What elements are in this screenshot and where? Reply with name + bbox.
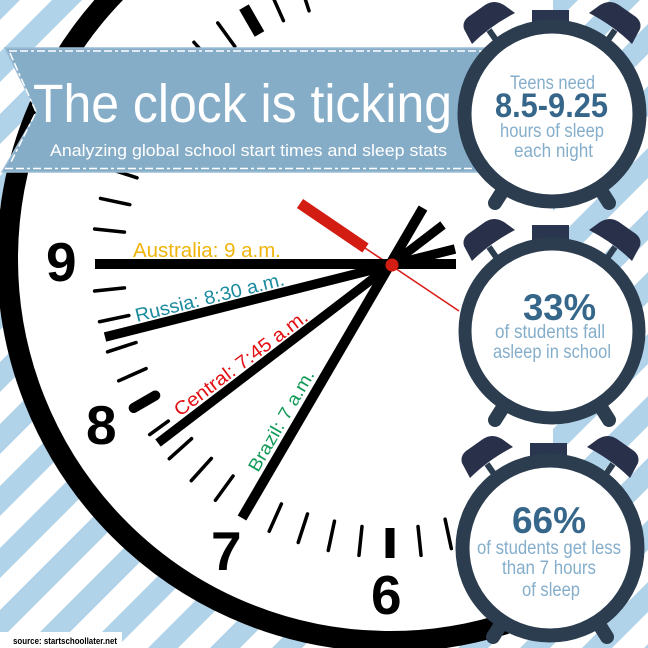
hand: Australia 9 a.m.	[95, 259, 456, 269]
label: Brazil: Brazil: 7 a.m.	[244, 366, 318, 475]
source note	[0, 632, 122, 648]
numeral 6: 6	[371, 564, 402, 626]
alarm clock: teens need: 8.5-9.25	[495, 87, 608, 125]
alarm clock: teens need: each night	[514, 141, 594, 162]
numeral 7: 7	[211, 520, 242, 582]
source note: source: startschoollater.net	[13, 636, 117, 646]
second hand	[300, 204, 459, 311]
label: Central: Central: 7:45 a.m.	[170, 307, 312, 421]
alarm clock: less than 7 hours	[462, 436, 638, 637]
alarm clock: teens need	[464, 2, 640, 203]
alarm clock: fall asleep	[464, 219, 640, 420]
numeral 9: 9	[46, 231, 77, 293]
hand: Brazil 7 a.m.	[242, 208, 423, 518]
hand: Russia 8:30 a.m.	[105, 249, 455, 337]
alarm clock: fall asleep: of students fall	[495, 322, 605, 343]
label: Australia: Australia: 9 a.m.	[133, 240, 281, 262]
alarm clock: less than 7 hours: of students get less	[477, 538, 621, 559]
alarm clock: teens need: Teens need	[510, 73, 595, 94]
alarm clock: less than 7 hours: of sleep	[522, 580, 580, 601]
hand: Central 7:45 a.m.	[158, 225, 443, 443]
alarm clock: fall asleep: 33%	[523, 287, 596, 328]
alarm clock: teens need: hours of sleep	[500, 121, 604, 142]
title banner	[2, 48, 500, 172]
heading: The clock is ticking	[33, 74, 452, 134]
alarm clock: less than 7 hours: 66%	[512, 500, 586, 541]
numeral 8: 8	[86, 394, 117, 456]
subheading: Analyzing global school start times and sleep stats	[50, 141, 447, 160]
center pivot	[386, 258, 398, 272]
minute and hour ticks	[95, 0, 451, 558]
alarm clock: fall asleep: asleep in school	[493, 342, 611, 363]
alarm clock: less than 7 hours: than 7 hours	[502, 558, 596, 579]
label: Russia: Russia: 8:30 a.m.	[133, 269, 287, 327]
